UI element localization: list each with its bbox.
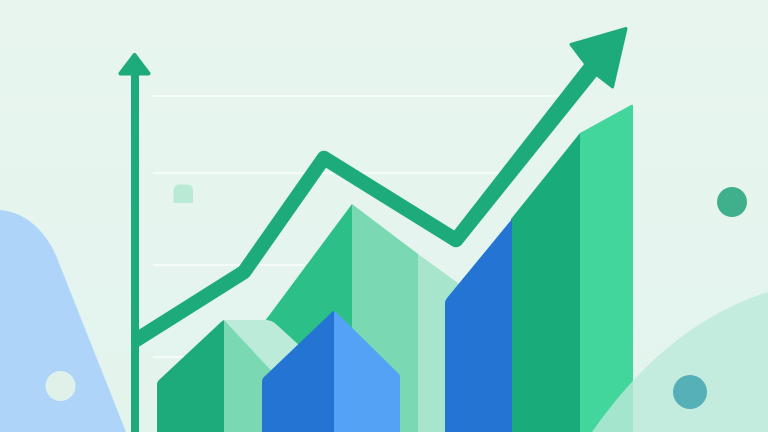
grid lines [153,96,560,357]
decorative blob: right green [592,292,768,432]
decorative blob: left blue [0,210,126,432]
bar: right tall green [511,105,633,432]
bars [157,105,633,432]
bar: middle green [262,204,462,432]
trend line arrow [125,28,626,347]
y axis arrow [120,55,148,432]
small rounded marker [174,184,193,203]
bar: right blue [445,219,512,432]
bar: front blue [262,311,400,432]
decorative dot: teal lower right [673,375,707,409]
decorative dot: pale on blue [46,371,76,401]
bar: left green [157,320,300,432]
decorative dot: green right [717,187,747,217]
